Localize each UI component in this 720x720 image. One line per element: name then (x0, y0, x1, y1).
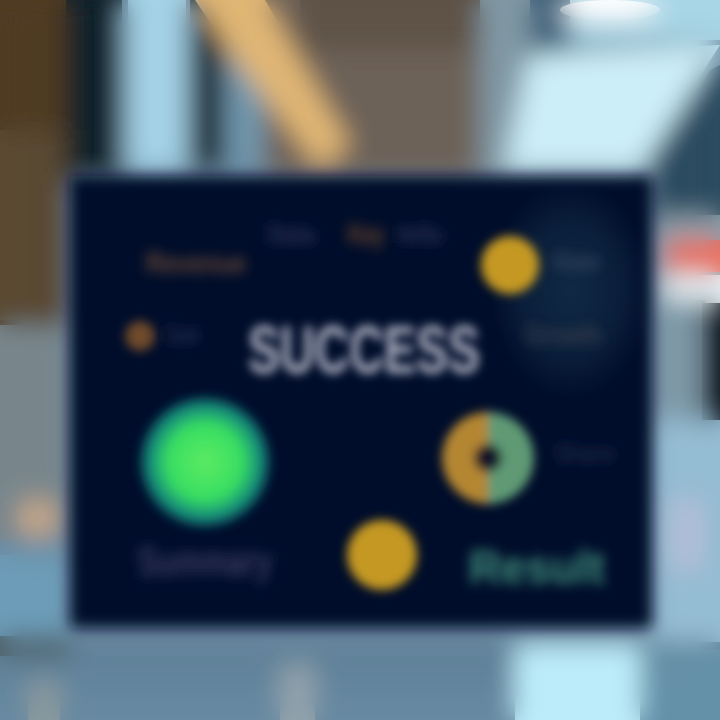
label: beside yellow circle: Rate (554, 249, 600, 276)
icon: yellow circle bottom (347, 520, 417, 590)
label: right of title: Growth (525, 319, 601, 350)
icon: yellow circle top (481, 236, 539, 294)
text block: below green circle: Summary (138, 540, 273, 584)
icon: green circle (139, 396, 271, 528)
label: top centre: Data (268, 219, 314, 249)
text block: right of donut: Share (555, 438, 615, 468)
chart: donut (442, 412, 534, 504)
panel tint: lighter upper right (490, 180, 652, 400)
label: top orange: Key (348, 218, 384, 251)
heading: top left label: Revenue (146, 247, 246, 280)
panel: dashboard board (70, 176, 652, 628)
icon: small orange marker (125, 321, 155, 351)
text block: green label: Result (469, 541, 605, 593)
title: SUCCESS (248, 312, 480, 388)
label: top blue: Info (398, 219, 442, 249)
label: beside orange marker: Cost (166, 322, 198, 349)
